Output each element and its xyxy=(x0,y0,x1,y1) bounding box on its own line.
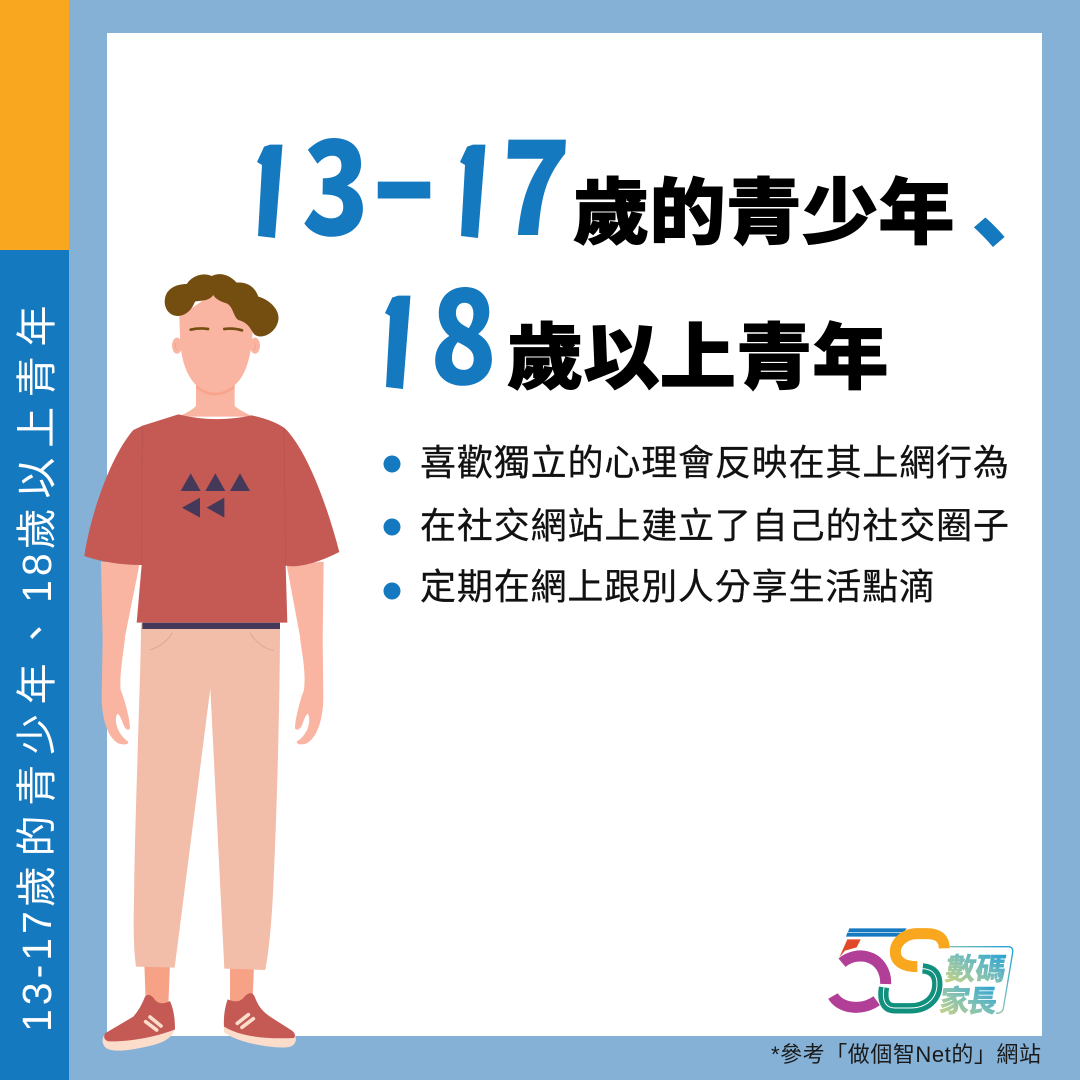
blue sidebar xyxy=(0,250,69,1080)
left shoe xyxy=(103,995,175,1051)
logo text: 家長 xyxy=(937,984,999,1018)
title number 18: 8 xyxy=(429,237,499,422)
title line one: 歲的青少年 xyxy=(573,173,955,254)
orange sidebar block xyxy=(0,0,69,250)
title number 18 xyxy=(385,287,492,389)
title number 13-17: - xyxy=(368,73,440,268)
title line two: 歲以上青年 xyxy=(507,318,889,399)
logo text xyxy=(937,952,1008,1018)
bullet one: 喜歡獨立的心理會反映在其上網行為 xyxy=(420,442,1009,483)
right arm xyxy=(287,562,324,744)
eyebrows xyxy=(191,328,242,330)
shirt triangles xyxy=(181,473,250,518)
logo xyxy=(833,928,1013,1018)
logo purple five xyxy=(833,956,886,1007)
logo green S xyxy=(883,968,937,1008)
title comma: 、 xyxy=(944,185,1034,285)
title number 13-17: 1 xyxy=(401,92,548,277)
logo text: 數碼 xyxy=(943,952,1008,986)
t-shirt xyxy=(84,414,339,623)
neck xyxy=(178,380,253,417)
title number 13-17: 1 xyxy=(198,92,345,277)
trousers xyxy=(134,623,280,970)
title number 13-17: 3 xyxy=(301,88,371,273)
bullet two: 在社交網站上建立了自己的社交圈子 xyxy=(420,505,1009,546)
right shoe xyxy=(224,993,296,1047)
belt xyxy=(142,623,280,629)
title number 13-17 xyxy=(257,138,566,238)
title number 18: 1 xyxy=(326,243,473,428)
logo stripes xyxy=(846,928,907,937)
illustration: young man standing xyxy=(84,274,339,1051)
ankles xyxy=(144,963,254,1005)
bullet three: 定期在網上跟別人分享生活點滴 xyxy=(420,566,935,607)
logo red wedge xyxy=(839,939,861,957)
sidebar vertical title: 13-17歲的青少年、18歲以上青年 xyxy=(14,296,60,1032)
title xyxy=(198,73,1034,428)
source note: *參考「做個智Net的」網站 xyxy=(771,1042,1041,1067)
title number 13-17: 7 xyxy=(496,86,574,272)
left arm xyxy=(101,562,139,744)
hair xyxy=(165,274,279,336)
head xyxy=(172,293,260,395)
logo rounded frame xyxy=(950,947,1013,1013)
logo orange S xyxy=(895,934,944,967)
bullet list xyxy=(384,442,1009,607)
